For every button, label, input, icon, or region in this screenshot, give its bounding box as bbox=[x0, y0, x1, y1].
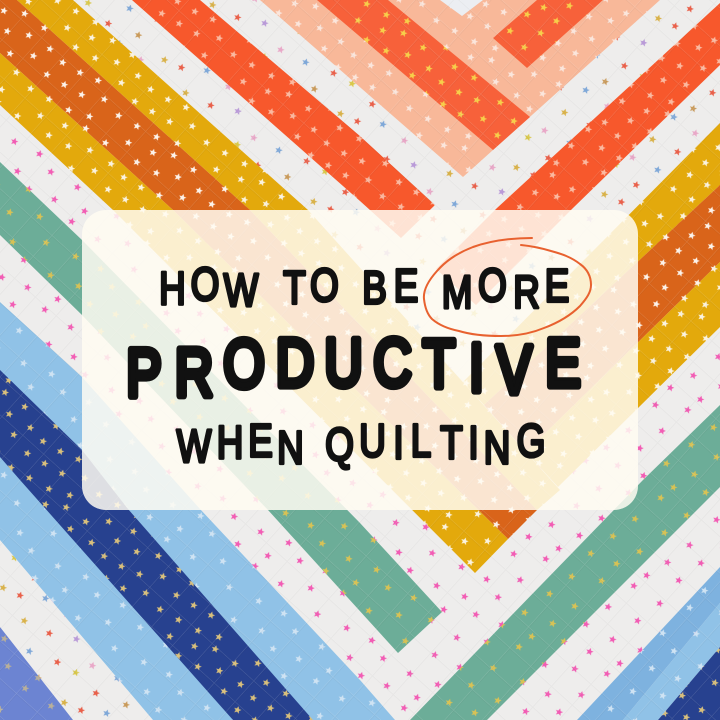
title line: productive: PRODUCTIVE bbox=[126, 325, 581, 410]
teal strip, left bbox=[0, 162, 442, 653]
white fabric with multicolour stars: bottom left bbox=[0, 540, 153, 720]
small red corner strip bbox=[493, 0, 603, 68]
small white centre triangle bbox=[440, 0, 483, 16]
white fabric with multicolour stars: top bbox=[73, 0, 720, 382]
upper yellow strip, right band bbox=[463, 123, 720, 405]
teal strip, right bbox=[410, 405, 720, 720]
translucent title panel bbox=[82, 210, 638, 510]
navy corner, lower right bbox=[658, 647, 720, 720]
hand-drawn circle around more bbox=[424, 238, 591, 336]
lower yellow strip, left band bbox=[0, 53, 508, 573]
red strip, right bbox=[436, 3, 720, 305]
title line: when quilting: WHEN QUILTING bbox=[177, 415, 545, 473]
periwinkle corner bbox=[0, 627, 73, 720]
title line: how to be more: HOW TO BE MORE bbox=[159, 258, 569, 318]
peach chevron bbox=[260, 0, 660, 177]
orange strip, right band bbox=[484, 185, 720, 452]
light blue strip, left bbox=[0, 302, 395, 720]
upper yellow strip, left band bbox=[17, 0, 560, 510]
light blue strip, lower right bbox=[577, 567, 720, 720]
title bbox=[126, 258, 581, 473]
lighter blue strip, lower right bbox=[623, 603, 720, 720]
red strip, left bbox=[132, 0, 435, 238]
navy strip, left bbox=[0, 370, 313, 720]
lower yellow strip, right band bbox=[526, 262, 720, 487]
inner red strip on peach bbox=[317, 0, 530, 150]
orange strip, left band bbox=[0, 0, 537, 539]
